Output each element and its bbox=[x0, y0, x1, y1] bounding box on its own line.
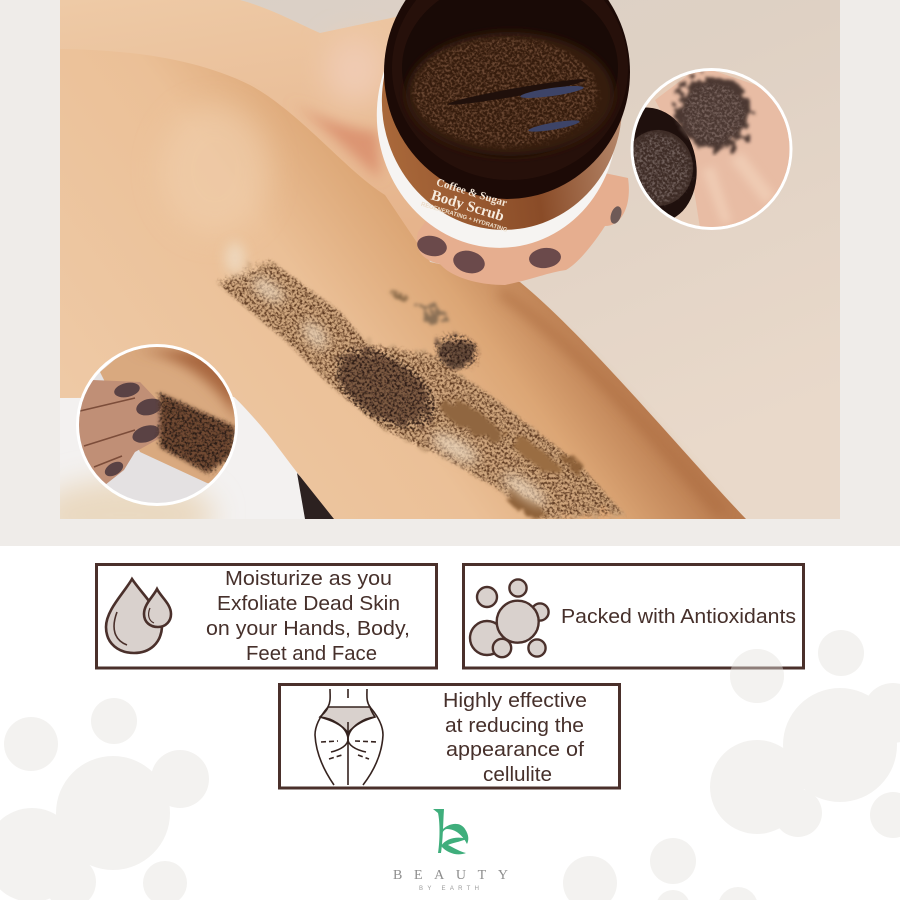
jar label text: REGENERATING + HYDRATING bbox=[420, 202, 508, 234]
fingers holding jar bbox=[415, 170, 629, 285]
text: cellulite bbox=[443, 690, 587, 786]
dark object behind leg bbox=[297, 473, 334, 519]
text: antioxidants: Packed with Antioxidants bbox=[561, 606, 796, 628]
text: cellulite: cellulite bbox=[483, 764, 552, 786]
jar label text bbox=[421, 179, 508, 232]
text: moisturize: Exfoliate Dead Skin bbox=[217, 593, 400, 615]
jar label text: Body Scrub bbox=[429, 188, 506, 225]
icon: water drops bbox=[106, 579, 171, 653]
feature box: moisturize bbox=[96, 564, 436, 668]
jar label text: Coffee & Sugar bbox=[435, 176, 509, 209]
text: moisturize: Moisturize as you bbox=[225, 568, 392, 590]
inset circle: massaging scrub bbox=[70, 344, 240, 509]
text: cellulite: at reducing the bbox=[445, 715, 584, 737]
palm bbox=[655, 71, 790, 227]
leg bbox=[60, 49, 746, 519]
scrub streak: brown grains bbox=[218, 262, 622, 519]
scrub: dark speckle bbox=[331, 330, 482, 432]
forearm and hand bbox=[60, 0, 430, 265]
leg in inset bbox=[100, 344, 240, 490]
icon: body cellulite bbox=[315, 689, 383, 785]
inset circle: scrub in palm bbox=[630, 68, 792, 230]
feature box: antioxidants bbox=[464, 564, 804, 668]
leg upper edge shadow bbox=[500, 292, 722, 515]
scrub streak: pale sand bbox=[218, 262, 622, 519]
leg highlight bbox=[168, 105, 272, 226]
panel: product photo bbox=[35, 0, 840, 551]
text: cellulite: Highly effective bbox=[443, 690, 587, 712]
photo backdrop bbox=[240, 0, 840, 519]
fingers in inset bbox=[79, 380, 161, 484]
small jar bbox=[634, 108, 697, 218]
hand shading bbox=[307, 111, 384, 176]
logo wordmark: BEAUTY bbox=[393, 868, 508, 883]
scrub: dark core bbox=[326, 292, 585, 523]
text: moisturize: Feet and Face bbox=[246, 643, 377, 665]
text: moisturize: on your Hands, Body, bbox=[206, 618, 410, 640]
translucent bubble overlapping box edge bbox=[730, 649, 784, 703]
white surface lower left bbox=[60, 397, 305, 519]
logo mark bbox=[433, 809, 468, 854]
jar bbox=[376, 0, 630, 248]
scrub inside jar bbox=[406, 32, 614, 156]
feature box: cellulite bbox=[280, 684, 620, 788]
pale patches in scrub bbox=[225, 242, 550, 511]
icon: molecule bubbles bbox=[470, 579, 549, 657]
jar white label band bbox=[376, 72, 614, 248]
decorative bubbles background bbox=[0, 630, 900, 900]
jar brown label bbox=[382, 76, 622, 230]
logo: Beauty by Earth bbox=[393, 809, 508, 892]
scrub on skin bbox=[160, 393, 235, 473]
jar body bbox=[384, 0, 630, 199]
text: cellulite: appearance of bbox=[446, 739, 584, 761]
logo tagline: BY EARTH bbox=[419, 886, 479, 892]
scrub in palm bbox=[677, 75, 751, 149]
text: moisturize bbox=[206, 568, 410, 665]
